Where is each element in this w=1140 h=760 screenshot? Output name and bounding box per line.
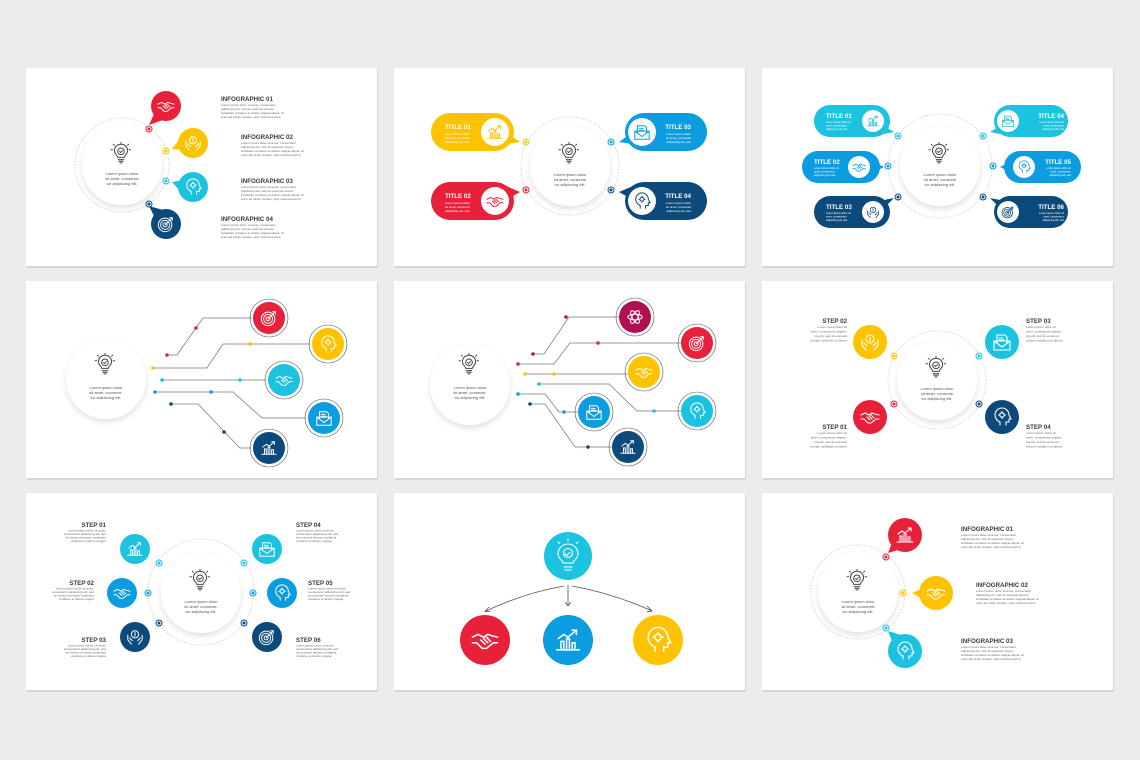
step 01 red: amet, consectetur adipisc- [811,436,847,440]
step 02 [52,578,151,608]
text: infographic 03: adipiscing elit, sed do eiusmod tempor [961,649,1014,653]
step 02 yellow: amet, consectetur adipisc- [811,330,847,334]
step 02: Lorem ipsum dolor sit amet, [56,586,94,590]
pill: title 01 yellow: Lorem ipsum dolor [445,132,470,136]
pill: title 04: TITLE 04 [1038,113,1065,120]
circle: red handshake [460,615,510,665]
text: infographic 01: enim ad minim veniam, quis nostrud exercit [221,115,281,119]
step 04 [241,522,338,566]
pill: title 03 blue: sit amet, consectet [666,136,691,140]
center circle [430,345,510,425]
step 01 red: Lorem ipsum dolor sit [817,431,847,435]
pill: title 04: Lorem ipsum dolor sit [1039,120,1064,124]
pill: title 01 yellow: TITLE 01 [445,124,471,131]
panel: slide 9 infographic 01-03 [762,493,1114,692]
text: infographic 02: Lorem ipsum dolor sit amet, consectetur [976,589,1031,593]
center circle: Lorem ipsum dolor [923,172,957,177]
text: infographic 03: Lorem ipsum dolor sit amet, consectetur [961,645,1016,649]
center circle: Lorem ipsum dolor [105,171,139,176]
pill: title 01: amet, consectetur [826,124,847,128]
pill: title 04 navy: TITLE 04 [665,193,692,200]
pill: title 01 yellow: adipiscing elit, sed [445,140,470,144]
center circle: Lorem ipsum dolor [841,599,875,604]
text: infographic 02: enim ad minim veniam, quis nostrud exercit [241,153,301,157]
step 04 navy: ing elit, sed do eiusmod [1026,440,1059,444]
pill: title 01 [814,105,901,139]
center circle: sit amet, consecte [924,177,957,182]
step 02: consectetur adipiscing elit, sed [52,590,94,594]
step 04 navy: tempor incididunt ut labore [1026,444,1063,448]
bubble: yellow money [163,128,208,158]
pill: title 03: amet, consectetur [826,214,847,218]
step 02: do eiusmod tempor incididunt [54,594,94,598]
center circle [900,126,980,206]
pill: title 02 [802,151,891,183]
step 03 cyan: Lorem ipsum dolor sit [1026,325,1056,329]
step 02 yellow: tempor incididunt ut labore [811,338,847,342]
text: infographic 02: Lorem ipsum dolor sit amet, consectetur [241,141,296,145]
center circle: tur adipiscing elit. [455,395,485,400]
pill: title 01 yellow: sit amet, consectet [445,136,470,140]
pill: title 04: adipiscing elit, sed [1043,127,1065,131]
pill: title 04 navy [608,182,707,220]
center circle: tur adipiscing elit. [107,181,137,186]
pill: title 02 red [431,182,529,220]
step 05: ut labore et dolore magna [308,597,344,601]
bubble: yellow handshake [900,576,953,610]
pill: title 03: adipiscing elit, sed [826,218,848,222]
step 02: STEP 02 [69,580,95,587]
text: infographic 04: adipiscing elit, sed do eiusmod tempor [221,227,274,231]
pill: title 03 blue [608,113,707,151]
center circle [82,125,162,205]
pill: title 02: adipiscing elit, sed [814,173,836,177]
text: infographic 02: INFOGRAPHIC 02 [241,134,293,141]
step 01 red: STEP 01 [822,424,848,431]
step 04 navy: amet, consectetur adipisc- [1026,436,1062,440]
center circle: sit amet, consecte- [184,604,218,609]
center circle: sit amet, consecte- [89,390,123,395]
pill: title 04 navy: sit amet, consectet [666,205,691,209]
text: infographic 03: enim ad minim veniam, quis nostrud exercit [241,197,301,201]
center circle: sit amet, consecte [921,391,954,396]
text: infographic 01: adipiscing elit, sed do eiusmod tempor [961,537,1014,541]
step 03: Lorem ipsum dolor sit amet, [68,644,106,648]
step 01: consectetur adipiscing elit, sed [64,532,106,536]
center circle: sit amet, consecte [554,177,587,182]
branch: yellow handshake [523,353,663,391]
branch: cyan head [537,382,716,430]
step 05: STEP 05 [308,580,333,587]
pill: title 01 yellow [431,113,529,151]
step 03 cyan: STEP 03 [1026,318,1051,325]
step 01 [64,522,162,566]
center circle: sit amet, consectet [841,604,876,609]
center circle: Lorem ipsum dolor [89,385,123,390]
step 04: ut labore et dolore magna [296,539,332,543]
center circle: tur adipiscing elit. [925,182,955,187]
circle: yellow head [633,615,683,665]
pill: title 06: amet, consectetur [1043,214,1064,218]
pill: title 04: amet, consectetur [1043,124,1064,128]
circle: blue chart [543,615,593,665]
pill: title 03 blue: Lorem ipsum dolor [666,132,691,136]
panel: slide 6 steps 01-04 [762,281,1114,480]
pill: title 02: TITLE 02 [814,159,840,166]
step 01 red: tempor incididunt ut labore [811,444,847,448]
pill: title 04 navy: adipiscing elit, sed [666,209,691,213]
step 05: Lorem ipsum dolor sit amet, [308,586,346,590]
text: infographic 01: Lorem ipsum dolor sit amet, consectetur [961,533,1016,537]
step 02 yellow: STEP 02 [822,318,848,325]
bubble: red handshake [146,91,181,132]
panel: slide 4 branching lines 5 items [26,281,378,480]
step 04 navy: Lorem ipsum dolor sit [1026,431,1056,435]
center circle: Lorem ipsum dolor [184,599,218,604]
text: infographic 04: incididunt ut labore et dolore magna aliqua. Ut [221,231,284,235]
center circle [161,553,241,633]
step 04: STEP 04 [296,522,321,529]
step 06: ut labore et dolore magna [296,654,332,658]
pill: title 02: Lorem ipsum dolor sit [814,166,839,170]
step 03: do eiusmod tempor incididunt [66,650,106,654]
text: infographic 03: incididunt ut labore et dolore magna aliqua. Ut [961,653,1024,657]
center circle: tur adipiscing elit. [91,395,121,400]
step 02 yellow: ing elit, sed do eiusmod [814,334,847,338]
step 05: do eiusmod tempor incididunt [308,594,349,598]
text: infographic 03: INFOGRAPHIC 03 [241,178,293,185]
step 01: ut labore et dolore magna [71,539,106,543]
step 04 navy: STEP 04 [1026,424,1051,431]
branch: navy chart [528,402,647,466]
step 05: consectetur adipiscing elit, sed [308,590,350,594]
pill: title 03 blue: adipiscing elit, sed [666,140,691,144]
step 01 red: ing elit, sed do eiusmod [814,440,847,444]
step 04 navy [976,400,1063,448]
panel: slide 7 steps 01-06 [26,493,378,692]
step 01: Lorem ipsum dolor sit amet, [68,528,106,532]
bubble: red chart [883,518,922,560]
step 03: consectetur adipiscing elit, sed [64,647,106,651]
pill: title 05: Lorem ipsum dolor sit [1046,166,1071,170]
branch: red target [516,324,716,366]
top circle: bulb [396,496,592,580]
text: infographic 03: Lorem ipsum dolor sit amet, consectetur [241,185,296,189]
center circle: sit amet, consectet [105,176,140,181]
step 03 cyan: tempor incididunt ut labore [1026,338,1063,342]
text: infographic 03: enim ad minim veniam, quis nostrud exercit [961,657,1021,661]
pill: title 03: Lorem ipsum dolor sit [826,211,851,215]
text: infographic 03: incididunt ut labore et dolore magna aliqua. Ut [241,193,304,197]
step 04: Lorem ipsum dolor sit amet, [296,528,334,532]
center circle: tur adipiscing elit. [186,609,216,614]
text: infographic 03: adipiscing elit, sed do eiusmod tempor [241,189,294,193]
step 01: STEP 01 [81,522,107,529]
panel: slide 3 titles 01-06 [762,68,1114,268]
center circle [818,552,898,632]
text: infographic 02: adipiscing elit, sed do eiusmod tempor [976,593,1029,597]
text: infographic 01: Lorem ipsum dolor sit amet, consectetur [221,103,276,107]
bubble: navy target [146,201,181,239]
panel: slide 5 branching lines 6 items [394,281,746,480]
pill: title 01: TITLE 01 [826,113,852,120]
text: infographic 04: Lorem ipsum dolor sit amet, consectetur [221,223,276,227]
step 03: ut labore et dolore magna [71,654,106,658]
step 03 cyan: ing elit, sed do eiusmod [1026,334,1059,338]
center circle: Lorem ipsum dolor [553,172,587,177]
text: infographic 01: enim ad minim veniam, quis nostrud exercit [961,545,1021,549]
center circle: tur adipiscing elit. [922,396,952,401]
branch: blue mail [516,392,613,431]
pill: title 04 [980,105,1068,139]
branch: blue mail [153,390,343,437]
center circle [897,340,977,420]
center circle: sit amet, consecte- [453,390,487,395]
step 01 red [811,400,897,448]
text: infographic 02: INFOGRAPHIC 02 [976,582,1028,589]
pill: title 05: amet, consectetur [1050,170,1071,174]
pill: title 03 [814,194,901,228]
text: infographic 03: INFOGRAPHIC 03 [961,638,1013,645]
bubble: cyan head [163,172,208,202]
text: infographic 02: incididunt ut labore et dolore magna aliqua. Ut [241,149,304,153]
branch: magenta atom [531,298,654,356]
step 05 [250,578,350,608]
pill: title 02 red: adipiscing elit, sed [445,209,470,213]
step 03: STEP 03 [81,637,107,644]
step 04: do eiusmod tempor incididunt [296,536,337,540]
step 06: Lorem ipsum dolor sit amet, [296,644,334,648]
pill: title 02 red: TITLE 02 [445,193,471,200]
step 06: consectetur adipiscing elit, sed [296,647,338,651]
text: infographic 04: enim ad minim veniam, quis nostrud exercit [221,235,281,239]
pill: title 01: adipiscing elit, sed [826,127,848,131]
center circle: tur adipiscing elit. [843,609,873,614]
pill: title 03: TITLE 03 [826,204,852,211]
text: infographic 01: incididunt ut labore et dolore magna aliqua. Ut [961,541,1024,545]
branch: yellow head [151,325,347,370]
branch: red target [165,299,288,357]
center circle: Lorem ipsum dolor [453,385,487,390]
text: infographic 01: incididunt ut labore et dolore magna aliqua. Ut [221,111,284,115]
text: infographic 02: enim ad minim veniam, quis nostrud exercit [976,601,1036,605]
step 06 [241,620,338,658]
center circle: tur adipiscing elit. [555,182,585,187]
text: infographic 02: incididunt ut labore et dolore magna aliqua. Ut [976,597,1039,601]
pill: title 05: TITLE 05 [1045,159,1072,166]
step 02 yellow [811,318,897,359]
step 03 cyan: amet, consectetur adipisc- [1026,330,1062,334]
pill: title 02 red: Lorem ipsum dolor [445,201,470,205]
pill: title 02: amet, consectetur [814,170,835,174]
center circle [66,339,146,419]
branch: navy chart [169,402,288,467]
step 06: STEP 06 [296,637,321,644]
panel: slide 8 tree diagram [394,493,746,692]
pill: title 05 [990,151,1081,183]
center circle [530,126,610,206]
pill: title 03 blue: TITLE 03 [665,124,692,131]
step 02: ut labore et dolore magna [59,597,94,601]
panel: slide 1 infographic 01-04 [26,68,378,268]
pill: title 01: Lorem ipsum dolor sit [826,120,851,124]
branch: cyan handshake [160,361,303,399]
pill: title 05: adipiscing elit, sed [1050,173,1072,177]
step 04: consectetur adipiscing elit, sed [296,532,338,536]
pill: title 06: TITLE 06 [1038,204,1065,211]
step 06: do eiusmod tempor incididunt [296,650,337,654]
text: infographic 01: INFOGRAPHIC 01 [221,96,273,103]
text: infographic 01: adipiscing elit, sed do eiusmod tempor [221,107,274,111]
pill: title 06 [980,194,1068,228]
step 03 cyan [976,318,1063,359]
text: infographic 04: INFOGRAPHIC 04 [221,216,273,223]
arrows [485,585,652,612]
pill: title 06: adipiscing elit, sed [1043,218,1065,222]
pill: title 02 red: sit amet, consectet [445,205,470,209]
step 01: do eiusmod tempor incididunt [66,536,106,540]
step 02 yellow: Lorem ipsum dolor sit [817,325,847,329]
pill: title 06: Lorem ipsum dolor sit [1039,211,1064,215]
text: infographic 02: adipiscing elit, sed do eiusmod tempor [241,145,294,149]
panel: slide 2 titles 01-04 [394,68,746,268]
bubble: cyan head [883,625,922,668]
pill: title 04 navy: Lorem ipsum dolor [666,201,691,205]
text: infographic 01: INFOGRAPHIC 01 [961,526,1013,533]
center circle: Lorem ipsum dolor [920,386,954,391]
step 03 [64,620,162,658]
